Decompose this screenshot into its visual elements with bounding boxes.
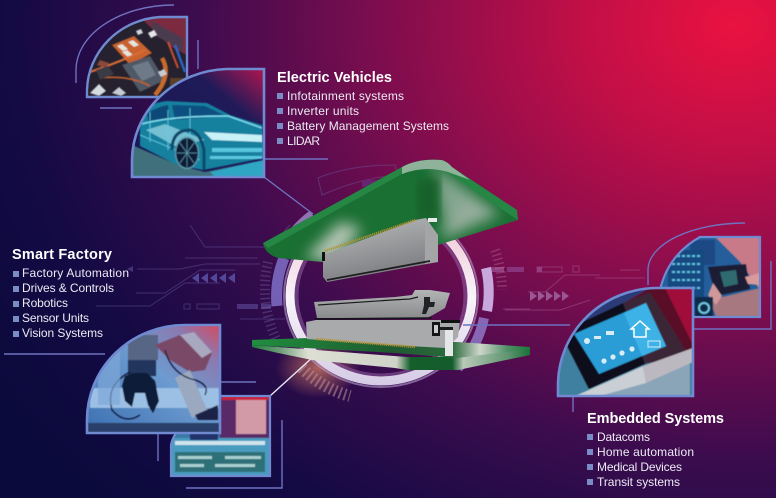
top board <box>263 160 518 262</box>
list: smart factory <box>13 266 129 340</box>
hud circuit decoration left <box>96 165 398 319</box>
list: smart factory: Drives & Controls <box>22 281 114 295</box>
panel: electric vehicles photos <box>87 17 264 177</box>
bottom board <box>252 338 530 370</box>
photo: battery engine bay <box>87 17 187 97</box>
list: electric vehicles: Infotainment systems <box>287 89 404 103</box>
list: embedded systems: Home automation <box>597 445 694 459</box>
list: electric vehicles: LIDAR <box>287 134 320 148</box>
heading: smart factory: Smart Factory <box>12 247 112 263</box>
chevrons left <box>192 273 235 283</box>
central rings <box>265 205 502 398</box>
photo: home automation screen <box>558 288 693 396</box>
list: embedded systems: Datacoms <box>597 430 650 444</box>
photo: factory circuit <box>171 396 270 476</box>
photo: wireframe car <box>132 69 264 177</box>
list: smart factory: Vision Systems <box>22 326 103 340</box>
list: smart factory: Sensor Units <box>22 311 89 325</box>
hud circuit decoration right <box>490 266 645 310</box>
list: electric vehicles <box>277 89 449 148</box>
panel: smart factory photos <box>87 325 270 476</box>
chevrons right <box>530 291 569 301</box>
photo: tablet in plant <box>660 237 760 317</box>
photo: robot arm <box>87 325 220 433</box>
heading: embedded systems: Embedded Systems <box>587 411 724 427</box>
top connector <box>322 218 438 282</box>
list: electric vehicles: Inverter units <box>287 104 359 118</box>
list: smart factory: Factory Automation <box>22 266 129 280</box>
bottom connector <box>306 290 460 356</box>
panel: embedded systems photos <box>558 237 760 396</box>
heading: electric vehicles: Electric Vehicles <box>277 70 392 86</box>
connector illustration <box>252 155 530 370</box>
list: embedded systems <box>587 430 694 489</box>
list: smart factory: Robotics <box>22 296 68 310</box>
list: embedded systems: Medical Devices <box>597 460 682 474</box>
list: embedded systems: Transit systems <box>597 475 680 489</box>
list: electric vehicles: Battery Management Systems <box>287 119 449 133</box>
